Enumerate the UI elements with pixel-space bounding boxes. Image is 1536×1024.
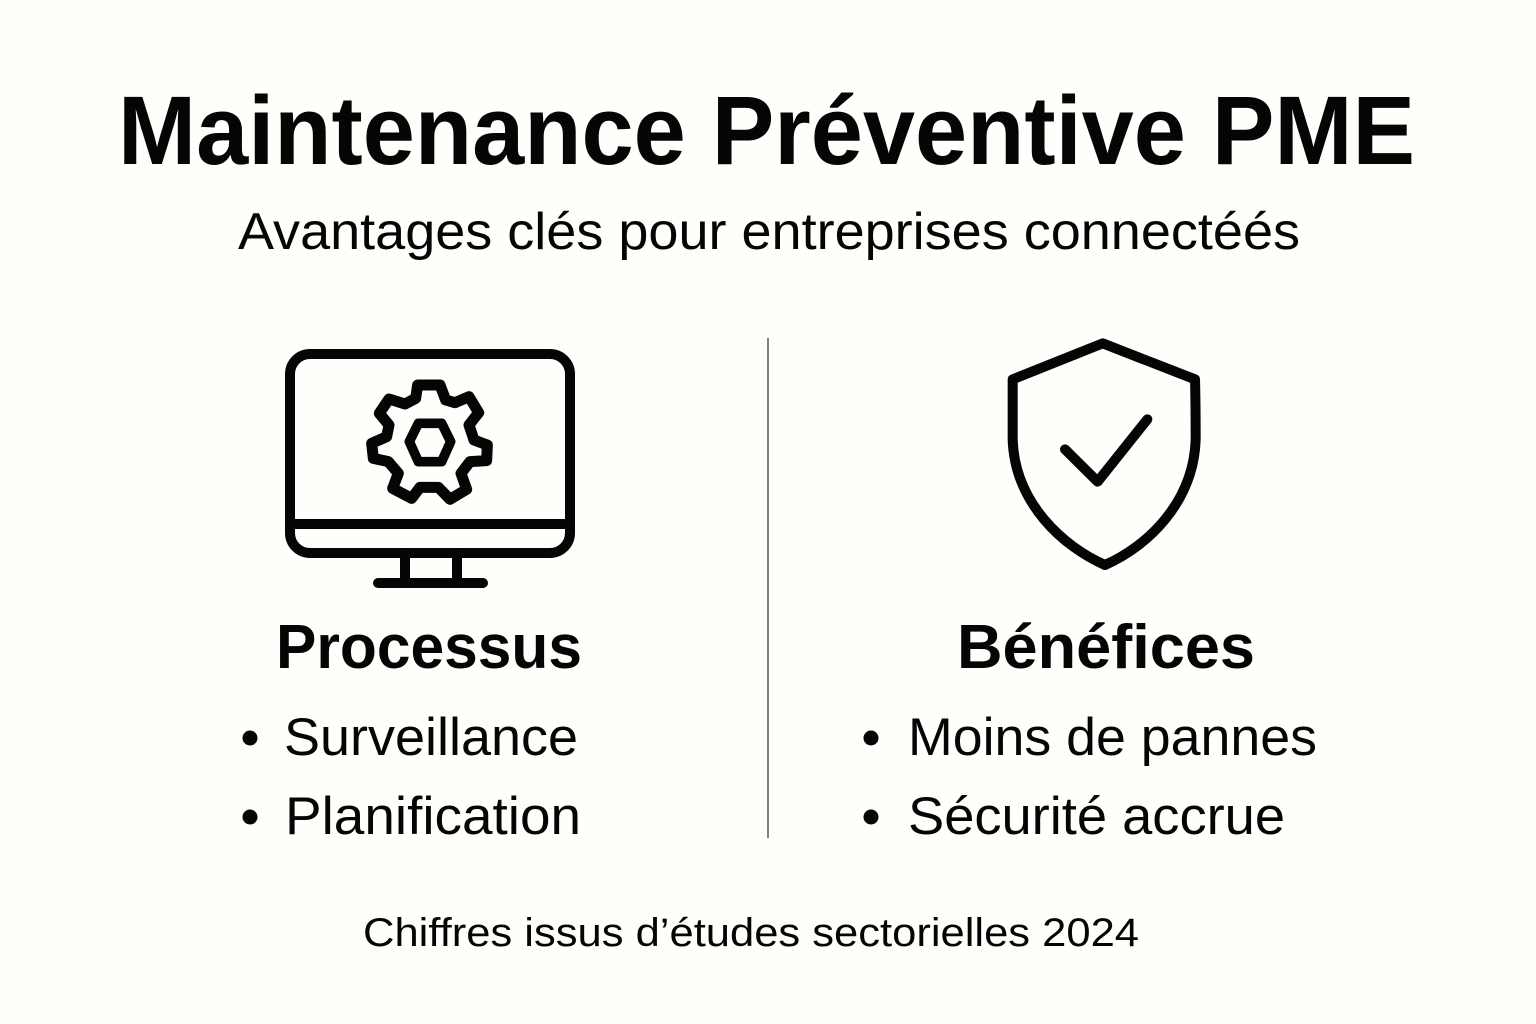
footer source note: Chiffres issus d’études sectorielles 2024 — [363, 911, 1139, 955]
panel: processus — [242, 354, 582, 846]
list item: moins de pannes: Moins de pannes — [908, 708, 1317, 767]
list item: surveillance: Surveillance — [284, 708, 578, 767]
heading: bénéfices: Bénéfices — [957, 613, 1255, 682]
icon: monitor with gear — [290, 354, 570, 583]
title: Maintenance Préventive PME — [118, 76, 1415, 185]
subtitle: Avantages clés pour entreprises connectéés — [238, 203, 1300, 261]
heading: processus: Processus — [276, 613, 582, 682]
list item: planification: Planification — [285, 787, 581, 846]
icon: shield with check — [1013, 343, 1196, 565]
list item: sécurité accrue: Sécurité accrue — [908, 787, 1285, 846]
panel: bénéfices — [864, 343, 1317, 846]
